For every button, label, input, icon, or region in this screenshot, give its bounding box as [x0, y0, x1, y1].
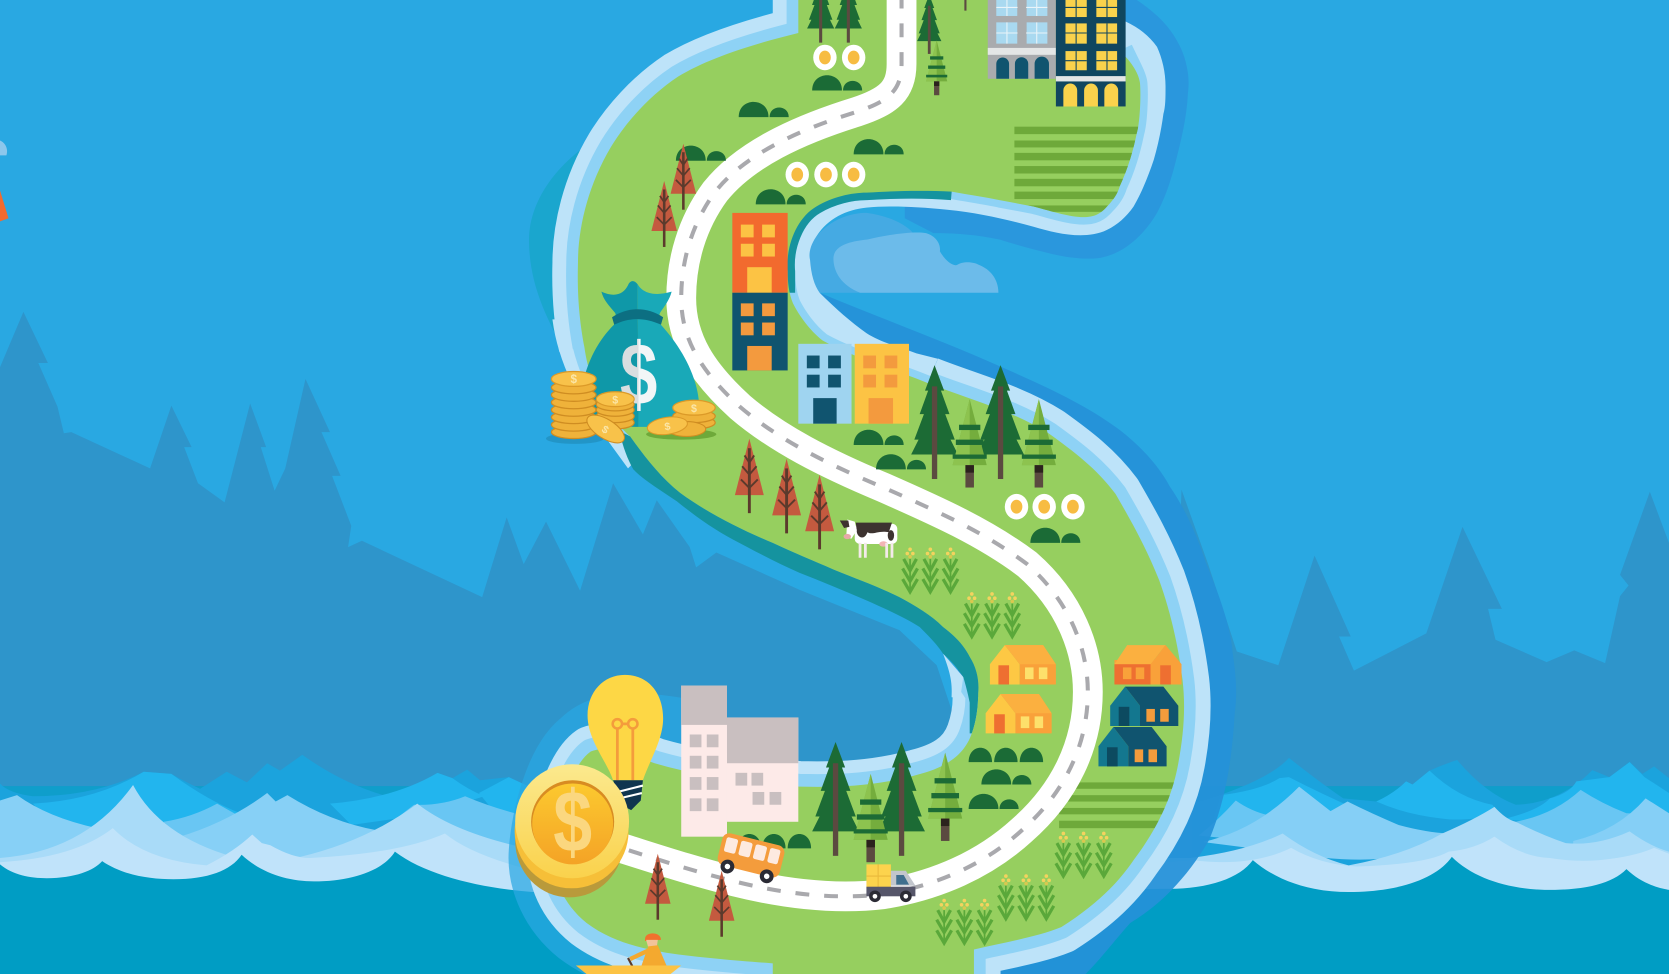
upper left dark trees: [807, 0, 966, 54]
navy tower: [732, 293, 788, 370]
horizon sea strip: [0, 786, 1669, 807]
flowers: [786, 45, 1085, 519]
light blue shoreline: [552, 0, 1184, 974]
farm field top: [1014, 127, 1153, 212]
orange bus: [714, 832, 786, 886]
gold coin stacks: $: [570, 373, 577, 386]
bushes: [676, 75, 1080, 848]
middle pine trees: [911, 365, 1056, 488]
halo lower left: [553, 738, 692, 953]
dark blue shadow top: [905, 0, 1189, 259]
large gold coin: [515, 764, 629, 897]
light blue building: [798, 344, 852, 424]
navy building top: [1056, 0, 1126, 106]
corn rows: [903, 547, 1111, 943]
gold coin stacks: [546, 372, 716, 448]
forest mountains silhouette left: [0, 312, 963, 793]
farm field bottom: [1059, 782, 1174, 828]
cloud: [833, 232, 998, 293]
small light tree top: [926, 40, 947, 95]
money bag: [580, 281, 699, 427]
red trees: [645, 144, 834, 937]
light bulb: [588, 675, 663, 810]
halo upper left: [529, 122, 628, 341]
offscreen icon fragments at left edge: [0, 141, 9, 221]
gold coin stacks: $: [599, 423, 611, 437]
pink office buildings: [681, 686, 798, 837]
sea: [0, 852, 1669, 974]
teal cliff band: [619, 431, 978, 733]
grey building top: [988, 0, 1056, 79]
rower in boat: [576, 933, 681, 974]
forest mountains silhouette right: [1171, 490, 1669, 793]
green land: [553, 0, 1184, 974]
gold coin stacks: $: [691, 403, 697, 415]
yellow building: [855, 344, 909, 424]
waves right: [1107, 758, 1669, 899]
money bag: $: [620, 325, 657, 424]
road: [623, 0, 1088, 896]
gold coin stacks: $: [612, 394, 618, 406]
gold coin stacks: $: [664, 421, 671, 433]
orange tower: [732, 213, 788, 293]
lower pine trees: [812, 742, 962, 862]
cow: [840, 519, 897, 558]
waves left: [0, 755, 543, 899]
large gold coin: $: [553, 772, 592, 870]
teal inner shore upper: [787, 191, 952, 293]
houses: [986, 645, 1181, 766]
dark blue shadow right: [820, 293, 1236, 974]
delivery truck: [866, 864, 915, 902]
dollar sign island: [529, 0, 1236, 974]
lighter shadow lobe behind cloud: [807, 213, 913, 293]
